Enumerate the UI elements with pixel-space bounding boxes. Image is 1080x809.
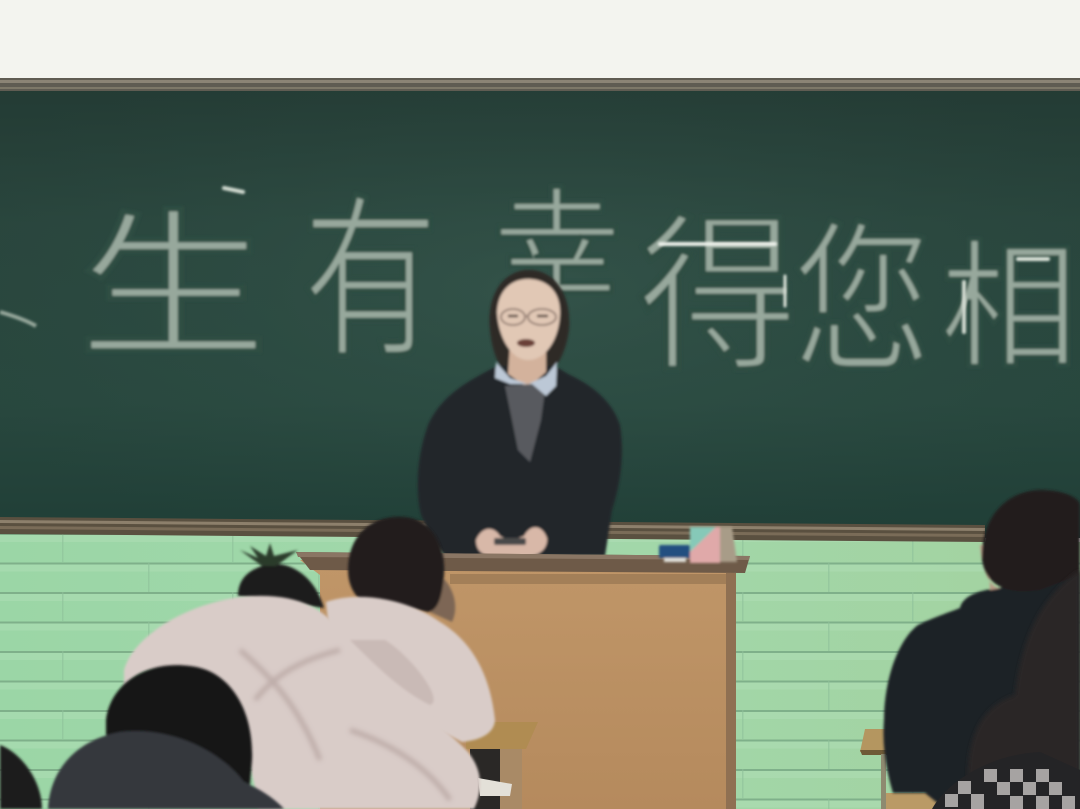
speaker bbox=[418, 270, 622, 556]
student right: head and dark jacket bbox=[883, 490, 1080, 809]
student: back head bbox=[348, 517, 455, 622]
mouth bbox=[517, 339, 535, 347]
student far right: hair and checked shirt bbox=[932, 570, 1080, 809]
chalk writing: 得 bbox=[638, 202, 798, 391]
shirt collar bbox=[495, 362, 557, 396]
student desk right bbox=[860, 729, 946, 809]
chalk ledge bbox=[0, 517, 985, 542]
chalk writing: 有 bbox=[303, 185, 438, 379]
jacket bbox=[418, 364, 622, 556]
student: pale jacket right bbox=[326, 597, 495, 742]
chalk writing: 您 bbox=[793, 210, 931, 393]
chalk writing bbox=[0, 177, 1078, 393]
chalk writing: 生 bbox=[78, 199, 268, 378]
student desk left bbox=[466, 722, 538, 809]
student: pale puffer jacket bbox=[124, 596, 480, 809]
student: front left head and dark hoodie bbox=[0, 665, 284, 809]
wall above blackboard bbox=[0, 0, 1080, 80]
striped vest bbox=[505, 383, 546, 462]
student: spiky hair bun bbox=[238, 543, 324, 608]
glasses bbox=[501, 309, 556, 325]
face bbox=[497, 279, 560, 360]
tissue box and eraser bbox=[659, 527, 737, 563]
eyes bbox=[508, 315, 548, 317]
fresh chalk strokes bbox=[224, 188, 1048, 332]
podium bbox=[296, 552, 750, 809]
hands with phone bbox=[476, 527, 547, 556]
neck bbox=[508, 345, 546, 388]
green brick wall bbox=[0, 530, 1080, 809]
chalk writing: 相 bbox=[940, 231, 1078, 385]
hair back bbox=[489, 270, 569, 366]
blackboard bbox=[0, 78, 1080, 538]
chalk writing: 幸 bbox=[493, 177, 621, 335]
